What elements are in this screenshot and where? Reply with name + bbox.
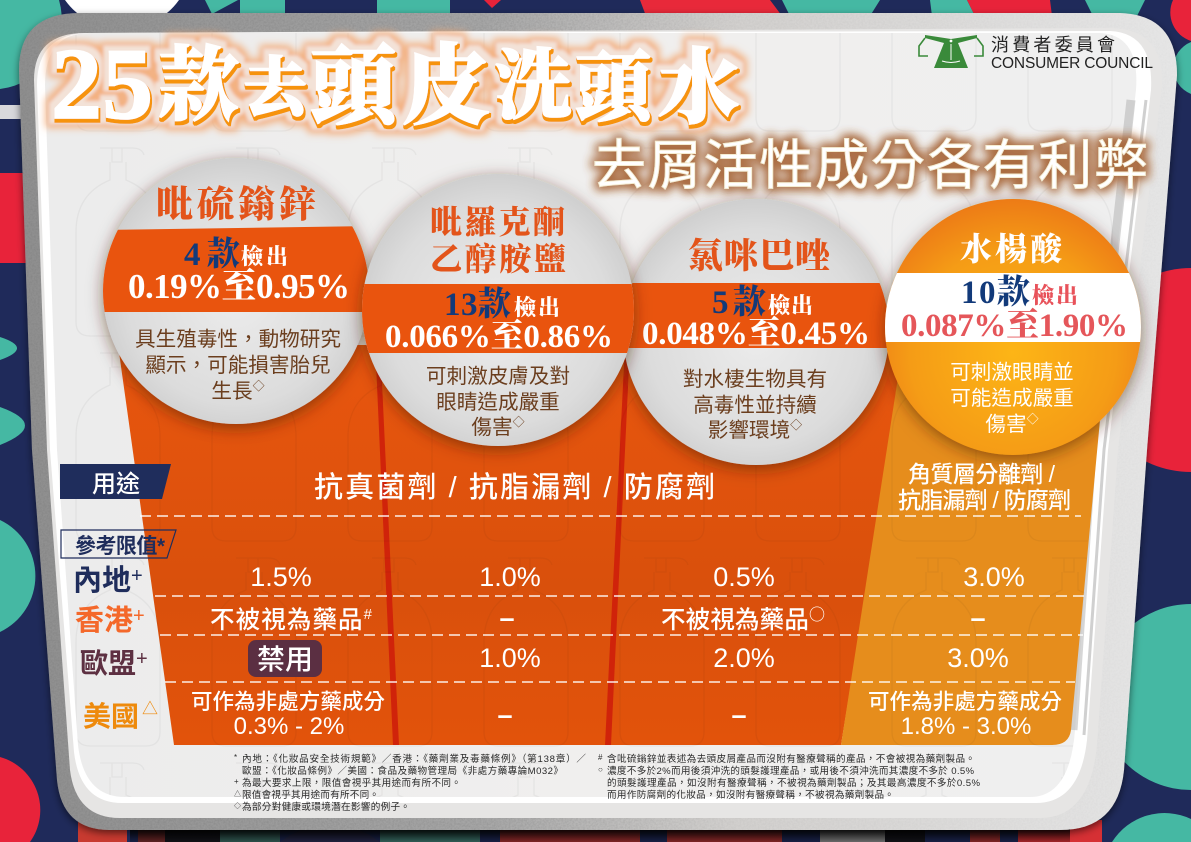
row labels: 香港 <box>75 605 133 637</box>
circle: 水楊酸: 傷害 <box>985 413 1027 436</box>
row: 美國 values: 0.3% - 2% <box>234 713 344 740</box>
badge: 禁用 <box>248 640 322 677</box>
circle: 氯咪巴唑: 0.048%至0.45% <box>642 315 870 352</box>
title: 款 <box>159 43 239 131</box>
circle: 吡羅克酮乙醇胺鹽: 0.066%至0.86% <box>385 318 613 355</box>
circle: 氯咪巴唑: 影響環境 <box>708 419 790 442</box>
row: 用途: 角質層分離劑 / <box>908 461 1056 487</box>
footnotes: right: 的頭髮護理產品，如沒附有醫療聲稱，不被視為藥劑製品；及其最高濃度不多於0.5% <box>607 777 980 789</box>
row: 美國 values: 1.8% - 3.0% <box>901 713 1031 740</box>
circle: 吡羅克酮乙醇胺鹽: 檢出 <box>514 295 560 320</box>
footnotes: left: 內地：《化妝品安全技術規範》／香港：《藥劑業及毒藥條例》（第138章）／ <box>242 753 586 765</box>
footnotes: left: + <box>234 777 239 786</box>
footnotes: left: △ <box>234 789 241 798</box>
row: 美國 values: – <box>497 700 513 730</box>
row: 香港 values: – <box>499 603 515 633</box>
badge: 禁用: 禁用 <box>257 644 313 675</box>
title: 頭 <box>310 39 402 135</box>
row: 歐盟 values: 3.0% <box>947 643 1009 673</box>
heading: 參考限值 <box>61 530 176 558</box>
subtitle: 去屑活性成分各有利弊 <box>592 136 1148 196</box>
circle: 吡羅克酮乙醇胺鹽: 眼睛造成嚴重 <box>436 391 560 414</box>
circle: 水楊酸: 可能造成嚴重 <box>950 387 1074 410</box>
row: 內地 values: 0.5% <box>713 562 775 592</box>
icon: scales <box>919 35 983 68</box>
row: 香港 values: ○ <box>809 601 825 625</box>
logo: consumer council <box>919 35 1153 72</box>
logo: consumer council: CONSUMER COUNCIL <box>991 55 1153 72</box>
row: 香港 values: 不被視為藥品 <box>210 607 363 634</box>
footnotes: left <box>234 753 586 813</box>
row labels: 內地 <box>73 565 131 597</box>
row: 歐盟 values: 2.0% <box>713 643 775 673</box>
footnotes: left: 限值會視乎其用途而有所不同。 <box>242 789 379 801</box>
logo: consumer council: 消費者委員會 <box>991 35 1115 55</box>
footnotes: right <box>598 753 980 801</box>
circle: 水楊酸: 可刺激眼睛並 <box>950 361 1074 384</box>
title: 洗 <box>495 45 571 129</box>
circle: 吡羅克酮乙醇胺鹽: 傷害 <box>471 416 513 439</box>
circle: 水楊酸: 檢出 <box>1032 283 1078 308</box>
footnotes: left: 為最大要求上限，限值會視乎其用途而有所不同。 <box>242 777 461 789</box>
heading tag: 用途: 用途 <box>92 471 140 498</box>
circle: 吡硫鎓鋅 <box>100 158 372 424</box>
footnotes: right: ○ <box>598 765 603 774</box>
circle: 水楊酸: 0.087%至1.90% <box>901 307 1128 344</box>
circle: 吡羅克酮乙醇胺鹽: 可刺激皮膚及對 <box>426 365 570 388</box>
row labels: 歐盟 <box>80 648 136 679</box>
title: 皮 <box>402 39 490 136</box>
row: 美國 values: – <box>731 700 747 730</box>
circle: 氯咪巴唑 <box>620 199 890 465</box>
row labels: + <box>131 565 143 587</box>
circle: 水楊酸: ◇ <box>1027 412 1039 426</box>
circle: 氯咪巴唑: ◇ <box>790 418 802 432</box>
footnotes: left: 為部分對健康或環境潛在影響的例子。 <box>242 801 410 813</box>
circle: 吡羅克酮乙醇胺鹽: ◇ <box>513 415 525 429</box>
footnotes: left: * <box>234 753 237 762</box>
circle: 吡硫鎓鋅: 吡硫鎓鋅 <box>156 184 316 226</box>
row labels: + <box>133 605 145 627</box>
title: 水 <box>658 43 740 134</box>
circle: 吡硫鎓鋅: 顯示，可能損害胎兒 <box>145 354 331 377</box>
title: 頭 <box>575 47 656 131</box>
heading: 參考限值: 參考限值* <box>75 535 166 558</box>
row labels <box>73 564 158 732</box>
row labels: △ <box>142 700 158 718</box>
circle: 吡硫鎓鋅: 生長 <box>211 380 253 403</box>
footnotes: right: 濃度不多於2%而用後須沖洗的頭髮護理產品，或用後不須沖洗而其濃度不多於 0.5% <box>607 765 974 777</box>
row: 歐盟 values <box>248 640 1009 677</box>
circle: 吡羅克酮乙醇胺鹽: 乙醇胺鹽 <box>430 241 566 277</box>
row: 香港 values <box>210 601 986 634</box>
circle: 吡硫鎓鋅: 4款 <box>184 235 240 273</box>
row: 用途 <box>60 461 1071 513</box>
circle: 吡羅克酮乙醇胺鹽 <box>360 174 640 446</box>
row: 內地 values <box>250 562 1025 592</box>
row: 香港 values: 不被視為藥品 <box>661 607 809 634</box>
row: 內地 values: 3.0% <box>963 562 1025 592</box>
row: 用途: 抗脂漏劑 / 防腐劑 <box>898 487 1071 513</box>
circle: 氯咪巴唑: 氯咪巴唑 <box>688 237 833 276</box>
circle: 氯咪巴唑: 5款 <box>712 283 766 321</box>
row: 內地 values: 1.5% <box>250 562 312 592</box>
row: 美國 values: 可作為非處方藥成分 <box>868 690 1062 714</box>
footnotes: right: 而用作防腐劑的化妝品，如沒附有醫療聲稱，不被視為藥劑製品。 <box>607 789 894 801</box>
circle: 吡硫鎓鋅: 具生殖毒性，動物研究 <box>135 328 341 351</box>
title: 25 <box>51 28 153 141</box>
row: 用途: 抗真菌劑 / 抗脂漏劑 / 防腐劑 <box>314 471 715 504</box>
circle: 吡羅克酮乙醇胺鹽: 13款 <box>444 285 511 323</box>
row: 內地 values: 1.0% <box>479 562 541 592</box>
circle: 吡羅克酮乙醇胺鹽: 吡羅克酮 <box>430 204 565 240</box>
circle: 水楊酸: 水楊酸 <box>960 231 1064 267</box>
circle: 水楊酸 <box>880 199 1150 455</box>
circle: 吡硫鎓鋅: 0.19%至0.95% <box>128 267 350 306</box>
row: 美國 values <box>191 690 1062 740</box>
circle: 水楊酸: 10款 <box>961 273 1030 311</box>
footnotes: left: ◇ <box>234 802 241 810</box>
row: 美國 values: 可作為非處方藥成分 <box>191 690 385 714</box>
heading tag: 用途 <box>60 464 171 499</box>
footnotes: left: 歐盟：《化妝品條例》／美國：食品及藥物管理局《非處方藥專論M032》 <box>242 765 563 777</box>
row labels: + <box>136 648 148 670</box>
footnotes: right: 含吡硫鎓鋅並表述為去頭皮屑產品而沒附有醫療聲稱的產品，不會被視為藥劑製品。 <box>607 753 975 765</box>
circle: 吡硫鎓鋅: 檢出 <box>241 244 288 269</box>
row: 香港 values: – <box>970 603 986 633</box>
footnotes: right: # <box>598 753 603 762</box>
row labels: 美國 <box>83 701 139 732</box>
circle: 氯咪巴唑: 對水棲生物具有 <box>683 368 827 391</box>
row: 歐盟 values: 1.0% <box>479 643 541 673</box>
title <box>51 28 740 141</box>
row: 香港 values: # <box>364 606 373 623</box>
title: 去 <box>243 53 312 124</box>
circle: 吡硫鎓鋅: ◇ <box>253 379 265 393</box>
circle: 氯咪巴唑: 高毒性並持續 <box>693 393 817 417</box>
circle: 氯咪巴唑: 檢出 <box>768 293 813 318</box>
